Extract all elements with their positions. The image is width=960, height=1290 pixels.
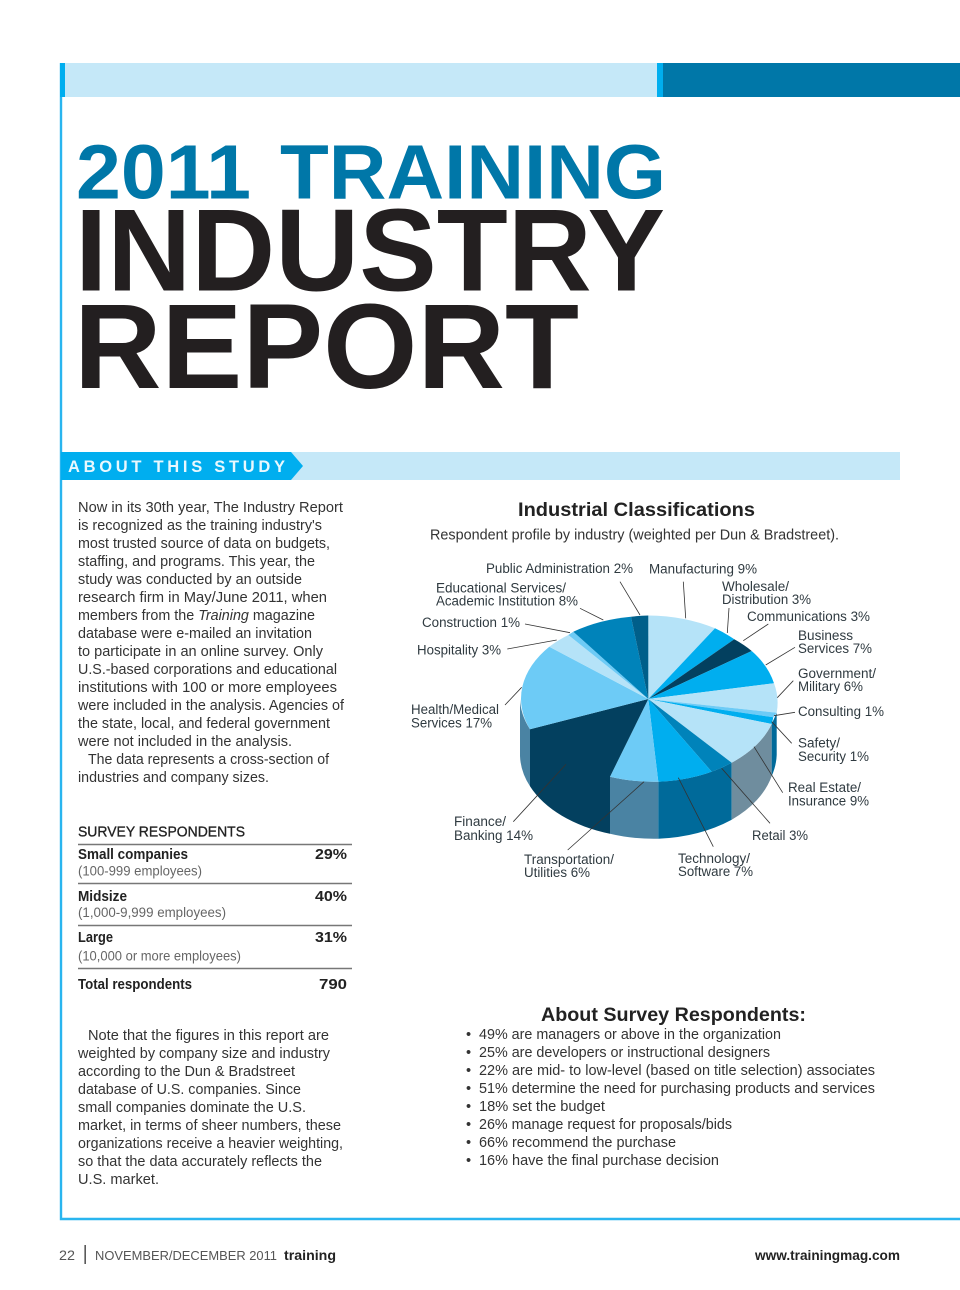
weighting note text block (77, 1028, 343, 1188)
weighting note text block: Note that the figures in this report are (88, 1028, 329, 1044)
about survey respondents bullet list: 51% determine the need for purchasing products and services (479, 1081, 875, 1097)
footer: www.trainingmag.com (754, 1248, 900, 1263)
title: TRAINING (280, 130, 666, 216)
about survey respondents bullet list: 26% manage request for proposals/bids (479, 1117, 732, 1133)
survey respondents table: 29% (315, 847, 347, 863)
about survey respondents bullet list: 25% are developers or instructional designers (479, 1045, 770, 1061)
pie labels: Finance/ (454, 814, 506, 829)
survey respondents table: 40% (315, 889, 347, 905)
pie labels: Retail 3% (752, 828, 808, 843)
survey respondents table: (10,000 or more employees) (78, 948, 241, 964)
intro text block: to participate in an online survey. Only (78, 644, 324, 660)
pie labels: Software 7% (678, 864, 753, 879)
intro text block: is recognized as the training industry's (78, 518, 322, 534)
weighting note text block: so that the data accurately reflects the (78, 1154, 322, 1170)
intro text block: staffing, and programs. This year, the (78, 554, 315, 570)
about survey respondents bullet list: • (466, 1027, 471, 1043)
weighting note text block: U.S. market. (78, 1172, 159, 1188)
intro text block: database were e-mailed an invitation (78, 626, 312, 642)
pie labels: Wholesale/ (722, 579, 789, 594)
about survey respondents bullet list: • (466, 1153, 471, 1169)
pie side walls (520, 699, 777, 839)
survey respondents table: SURVEY RESPONDENTS (78, 824, 245, 840)
intro text block: industries and company sizes. (78, 770, 269, 786)
weighting note text block: organizations receive a heavier weighting, (78, 1136, 343, 1152)
footer: training (284, 1248, 336, 1263)
intro text block: members from the Training magazine (78, 608, 315, 624)
about survey respondents bullet list: 49% are managers or above in the organization (479, 1027, 781, 1043)
about survey respondents bullet list: 16% have the final purchase decision (479, 1153, 719, 1169)
pie labels: Construction 1% (422, 615, 520, 630)
pie labels: Distribution 3% (722, 592, 811, 607)
footer (59, 1245, 900, 1264)
intro text block: research firm in May/June 2011, when (78, 590, 327, 606)
pie labels: Government/ (798, 666, 876, 681)
pie labels: Educational Services/ (436, 580, 566, 596)
intro text block: The data represents a cross-section of (88, 752, 330, 768)
section banner: about this study (61, 452, 900, 480)
3D pie chart (411, 561, 884, 880)
survey respondents table (78, 824, 352, 993)
about survey respondents bullet list: 18% set the budget (479, 1099, 605, 1115)
weighting note text block: weighted by company size and industry (77, 1046, 331, 1062)
about survey respondents bullet list (466, 1027, 875, 1169)
weighting note text block: database of U.S. companies. Since (78, 1082, 301, 1098)
section banner: about this study: ABOUT THIS STUDY (68, 458, 285, 476)
top color bar (60, 63, 960, 97)
pie labels: Security 1% (798, 749, 869, 764)
pie labels: Services 17% (411, 716, 492, 730)
about survey respondents bullet list: • (466, 1135, 471, 1151)
about survey respondents bullet list: 22% are mid- to low-level (based on title selection) associates (479, 1063, 875, 1079)
footer: 22 (59, 1247, 75, 1263)
pie labels: Insurance 9% (788, 794, 869, 808)
about survey respondents bullet list: • (466, 1099, 471, 1115)
intro text block: were included in the analysis. Agencies of (77, 698, 345, 714)
pie top slices (521, 616, 778, 834)
survey respondents table: Total respondents (78, 977, 192, 993)
survey respondents table: 31% (315, 930, 347, 946)
weighting note text block: small companies dominate the U.S. (78, 1100, 306, 1116)
pie labels: Banking 14% (454, 828, 533, 843)
pie labels (411, 561, 884, 880)
survey respondents table: Large (78, 930, 113, 946)
footer: NOVEMBER/DECEMBER 2011 (95, 1249, 277, 1263)
about survey respondents heading: About Survey Respondents: (541, 1004, 806, 1026)
chart heading: Industrial Classifications (518, 499, 755, 521)
survey respondents table: (1,000-9,999 employees) (78, 905, 226, 920)
title: INDUSTRY (75, 184, 665, 316)
intro text block: institutions with 100 or more employees (78, 680, 337, 696)
about survey respondents bullet list: 66% recommend the purchase (479, 1135, 676, 1151)
about survey respondents bullet list: • (466, 1081, 471, 1097)
pie labels: Public Administration 2% (486, 561, 633, 576)
intro text block: U.S.-based corporations and educational (78, 662, 337, 678)
pie labels: Utilities 6% (524, 865, 590, 880)
survey respondents table: (100-999 employees) (78, 864, 202, 878)
pie labels: Services 7% (798, 641, 872, 656)
about survey respondents bullet list: • (466, 1063, 471, 1079)
pie labels: Military 6% (798, 679, 863, 694)
pie labels: Consulting 1% (798, 704, 884, 719)
pie labels: Manufacturing 9% (649, 562, 757, 576)
weighting note text block: according to the Dun & Bradstreet (78, 1064, 295, 1080)
intro text block: Now in its 30th year, The Industry Report (78, 500, 343, 516)
survey respondents table: Midsize (78, 889, 127, 905)
pie labels: Academic Institution 8% (436, 594, 578, 608)
title (74, 130, 666, 414)
intro text block: were not included in the analysis. (77, 734, 292, 750)
title: REPORT (74, 278, 579, 414)
pie labels: Hospitality 3% (417, 642, 501, 658)
pie labels: Transportation/ (524, 852, 614, 867)
weighting note text block: market, in terms of sheer numbers, these (78, 1118, 341, 1134)
intro text block (77, 500, 345, 786)
chart subheading: Respondent profile by industry (weighted per Dun & Bradstreet). (430, 528, 839, 544)
pie labels: Communications 3% (747, 609, 870, 624)
survey respondents table: Small companies (78, 847, 188, 863)
about survey respondents bullet list: • (466, 1117, 471, 1133)
pie labels: Safety/ (798, 736, 840, 750)
about survey respondents bullet list: • (466, 1045, 471, 1061)
intro text block: study was conducted by an outside (78, 572, 302, 588)
pie labels: Health/Medical (411, 702, 499, 717)
pie labels: Business (798, 628, 853, 643)
title: 2011 (76, 130, 251, 216)
pie leader lines (505, 582, 795, 850)
pie labels: Technology/ (678, 851, 750, 866)
survey respondents table: 790 (319, 977, 347, 993)
pie labels: Real Estate/ (788, 780, 861, 795)
intro text block: the state, local, and federal government (78, 716, 330, 732)
intro text block: most trusted source of data on budgets, (78, 536, 330, 552)
